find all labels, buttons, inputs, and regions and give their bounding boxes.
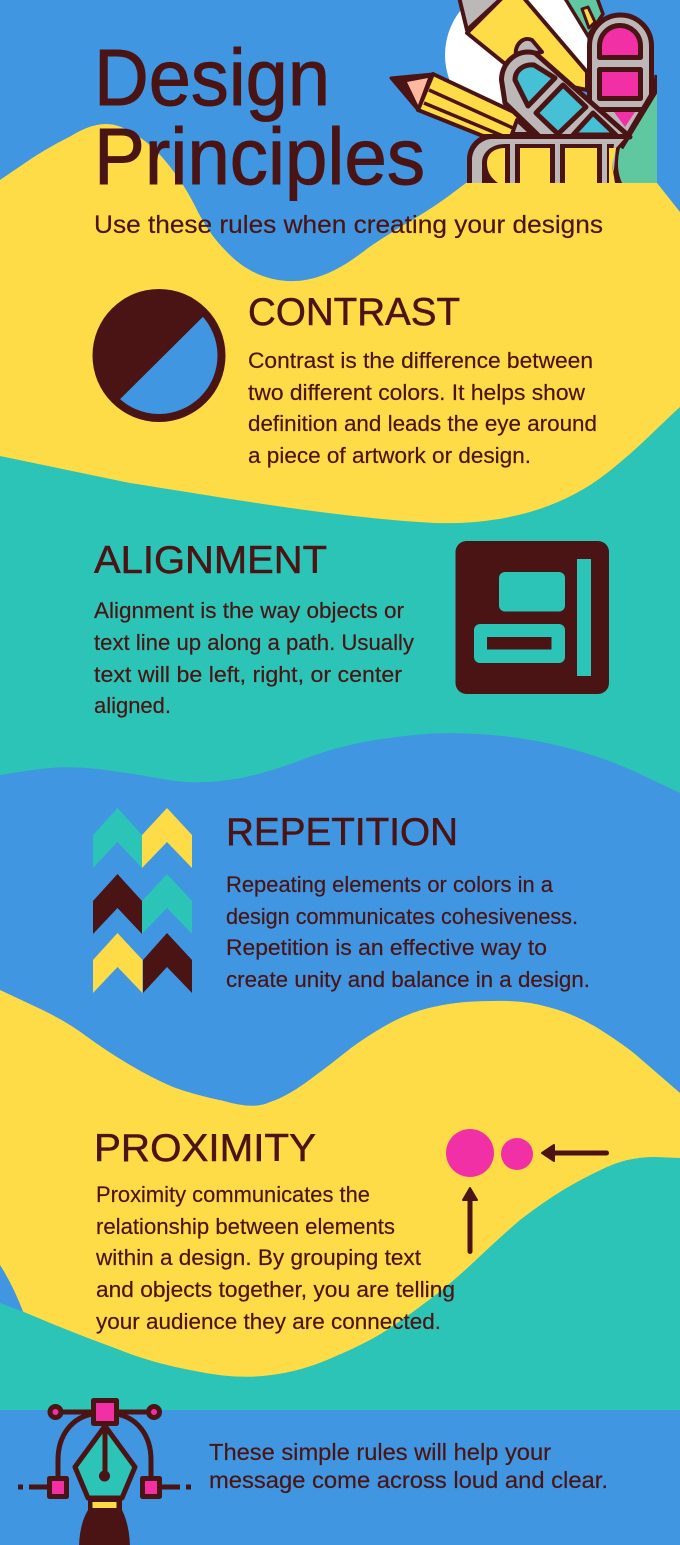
wave: teal lower bbox=[0, 1157, 680, 1415]
heading: alignment: ALIGNMENT bbox=[94, 539, 327, 582]
large pencil bbox=[467, 0, 587, 90]
text: contrast body: definition and leads the eye around bbox=[248, 411, 597, 436]
panel: contrast bbox=[92, 289, 597, 468]
icon: large pink dot bbox=[446, 1129, 494, 1177]
wave: teal middle bbox=[0, 407, 680, 1000]
icon: chevrons bbox=[93, 808, 192, 993]
text: closing message bbox=[209, 1439, 608, 1493]
small pencil bbox=[418, 74, 520, 136]
panel: alignment bbox=[94, 539, 609, 718]
heading: proximity: PROXIMITY bbox=[94, 1127, 316, 1170]
text: contrast body: two different colors. It helps show bbox=[248, 380, 585, 405]
text: repetition body: design communicates cohesiveness. bbox=[226, 904, 578, 929]
text: closing message: These simple rules will help your bbox=[209, 1439, 551, 1465]
text: alignment body: aligned. bbox=[94, 693, 171, 718]
wave: yellow lower bbox=[0, 990, 680, 1420]
text: proximity body: within a design. By grouping text bbox=[95, 1245, 421, 1270]
white circle bbox=[445, 0, 588, 106]
footer band bbox=[0, 1410, 680, 1545]
panel: closing bbox=[18, 1400, 608, 1545]
text: proximity body: your audience they are connected. bbox=[96, 1309, 441, 1334]
text: repetition body: Repeating elements or colors in a bbox=[226, 872, 554, 897]
mint ruler bbox=[563, 0, 603, 36]
icon: pen tool bbox=[18, 1400, 191, 1545]
text: repetition body bbox=[226, 872, 590, 992]
text: contrast body bbox=[248, 348, 597, 468]
mint triangle bbox=[618, 94, 657, 183]
text: alignment body: text line up along a path. Usually bbox=[94, 630, 414, 655]
diagonal swatch blade bbox=[502, 52, 630, 137]
text: contrast body: a piece of artwork or design. bbox=[248, 443, 531, 468]
panel: proximity bbox=[94, 1127, 609, 1334]
horizontal swatch blade bbox=[467, 134, 624, 183]
lower gray wedge bbox=[512, 120, 532, 134]
text: proximity body bbox=[95, 1182, 455, 1334]
text: repetition body: Repetition is an effective way to bbox=[226, 935, 547, 960]
text: contrast body: Contrast is the difference between bbox=[248, 348, 593, 373]
arrow: up bbox=[463, 1188, 477, 1254]
illustration: design tools bbox=[391, 0, 660, 190]
text: alignment body bbox=[94, 598, 414, 718]
text: alignment body: text will be left, right, or center bbox=[94, 662, 402, 687]
heading: contrast: CONTRAST bbox=[248, 291, 460, 334]
text: alignment body: Alignment is the way objects or bbox=[94, 598, 404, 623]
text: proximity body: relationship between elements bbox=[96, 1214, 395, 1239]
arrow: left bbox=[542, 1145, 609, 1161]
text: repetition body: create unity and balance in a design. bbox=[226, 967, 590, 992]
wave: yellow top bbox=[0, 124, 680, 800]
text: proximity body: and objects together, you are telling bbox=[96, 1277, 455, 1302]
icon: alignment layout bbox=[456, 541, 609, 694]
subtitle: Use these rules when creating your designs bbox=[94, 211, 603, 239]
title: Principles bbox=[94, 112, 425, 201]
panel: repetition bbox=[93, 808, 590, 993]
icon: contrast circle bbox=[92, 289, 226, 422]
text: proximity body: Proximity communicates the bbox=[96, 1182, 370, 1207]
title: Design bbox=[94, 33, 330, 122]
title bbox=[94, 33, 425, 201]
text: closing message: message come across loud and clear. bbox=[209, 1467, 608, 1493]
heading: repetition: REPETITION bbox=[226, 811, 458, 854]
wave: blue middle bbox=[0, 733, 680, 1200]
bump bbox=[516, 39, 542, 56]
icon: small pink dot bbox=[501, 1138, 533, 1170]
wave: blue sliver bbox=[0, 1265, 24, 1320]
vertical swatch blade bbox=[590, 15, 652, 140]
